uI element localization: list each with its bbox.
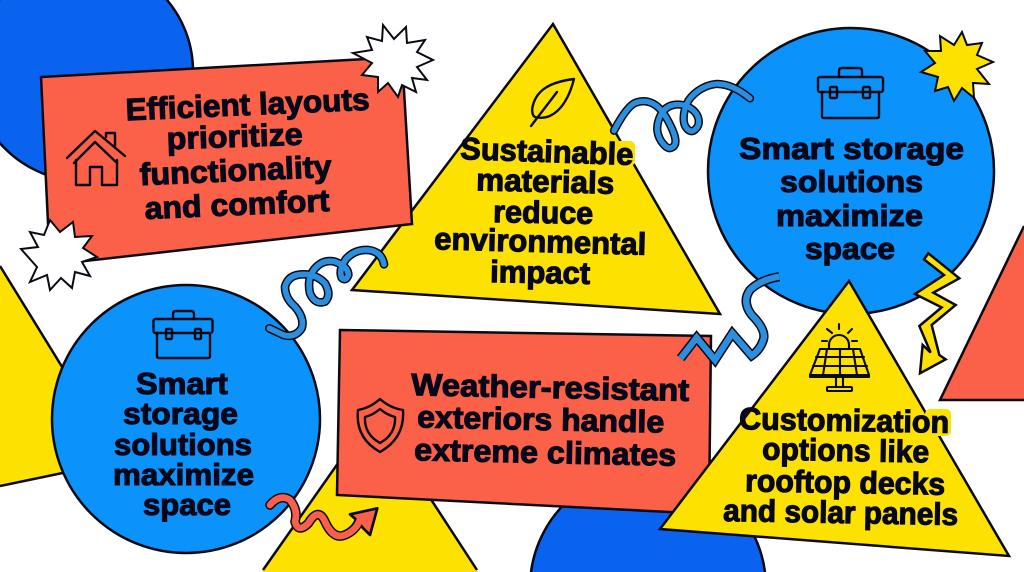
text: smart storage: solutions (114, 427, 252, 462)
text: weather-resistant: extreme climates (414, 432, 677, 473)
circle shape (708, 28, 994, 314)
text: weather-resistant: exteriors handle (417, 399, 665, 440)
text: smart storage (739, 131, 964, 266)
panel: smart storage circle left (52, 285, 320, 553)
text: customization: and solar panels (723, 493, 958, 532)
text: efficient layouts: prioritize (166, 117, 303, 156)
arrow: yellow lightning bolt (915, 253, 959, 373)
text: smart storage (113, 366, 254, 522)
text: smart storage: solutions (780, 164, 923, 199)
text: smart storage: space (143, 487, 231, 522)
icon: shield (358, 399, 403, 452)
background shape: yellow triangle left edge (0, 266, 120, 486)
icon: toolbox (154, 311, 212, 358)
arrow: blue zigzag squiggle (681, 277, 779, 360)
triangle shape (660, 281, 1009, 556)
circle shape (52, 285, 320, 553)
icon: leaf (531, 79, 574, 126)
text: sustainable materials: reduce (493, 194, 593, 231)
panel: weather-resistant rectangle (337, 330, 711, 514)
text: customization (723, 401, 958, 532)
triangle shape (352, 24, 720, 314)
arrow: red wavy arrow (270, 498, 377, 536)
rectangle shape (337, 330, 711, 514)
text: sustainable materials: impact (490, 254, 590, 291)
rectangle shape (41, 57, 412, 265)
text: smart storage: maximize (113, 457, 254, 492)
icon: house (67, 131, 125, 185)
panel: customization triangle (660, 281, 1009, 556)
panel: efficient layouts rectangle (41, 57, 412, 265)
background shape: yellow triangle bottom (262, 412, 478, 572)
text: customization: Customization (739, 401, 949, 440)
text halo (614, 141, 635, 166)
text: smart storage: maximize (776, 198, 923, 233)
text: sustainable materials: Sustainable (460, 131, 634, 172)
arrow: blue loop squiggle middle (269, 250, 384, 336)
text: smart storage: Smart (136, 366, 228, 401)
panel: smart storage circle right (708, 28, 994, 314)
text: weather-resistant: Weather-resistant (411, 367, 690, 408)
text: efficient layouts: and comfort (144, 183, 330, 226)
icon: white starburst bottom (21, 220, 97, 290)
text: weather-resistant (411, 367, 690, 473)
text: sustainable materials: environmental (434, 221, 647, 262)
text halo (925, 409, 951, 436)
text: customization: options like (762, 432, 929, 469)
text: smart storage: Smart storage (739, 131, 964, 166)
icon: white starburst top (353, 25, 433, 97)
text: sustainable materials (434, 131, 647, 291)
icon: solar panel (810, 324, 869, 391)
text: efficient layouts (125, 82, 370, 226)
icon: yellow starburst (921, 32, 993, 101)
text: smart storage: space (805, 231, 895, 266)
text: smart storage: storage (123, 396, 238, 431)
text: sustainable materials: materials (476, 162, 615, 201)
icon: toolbox (818, 68, 883, 118)
text: efficient layouts: functionality (139, 149, 333, 192)
background shape: dark blue circle bottom (531, 469, 765, 572)
background shape: red triangle right edge (940, 226, 1024, 400)
text: customization: rooftop decks (745, 463, 945, 502)
background shape: dark blue circle top left (0, 0, 193, 181)
panel: sustainable materials triangle (352, 24, 720, 314)
arrow: blue loop squiggle top (614, 84, 750, 148)
text: efficient layouts: Efficient layouts (125, 82, 370, 127)
